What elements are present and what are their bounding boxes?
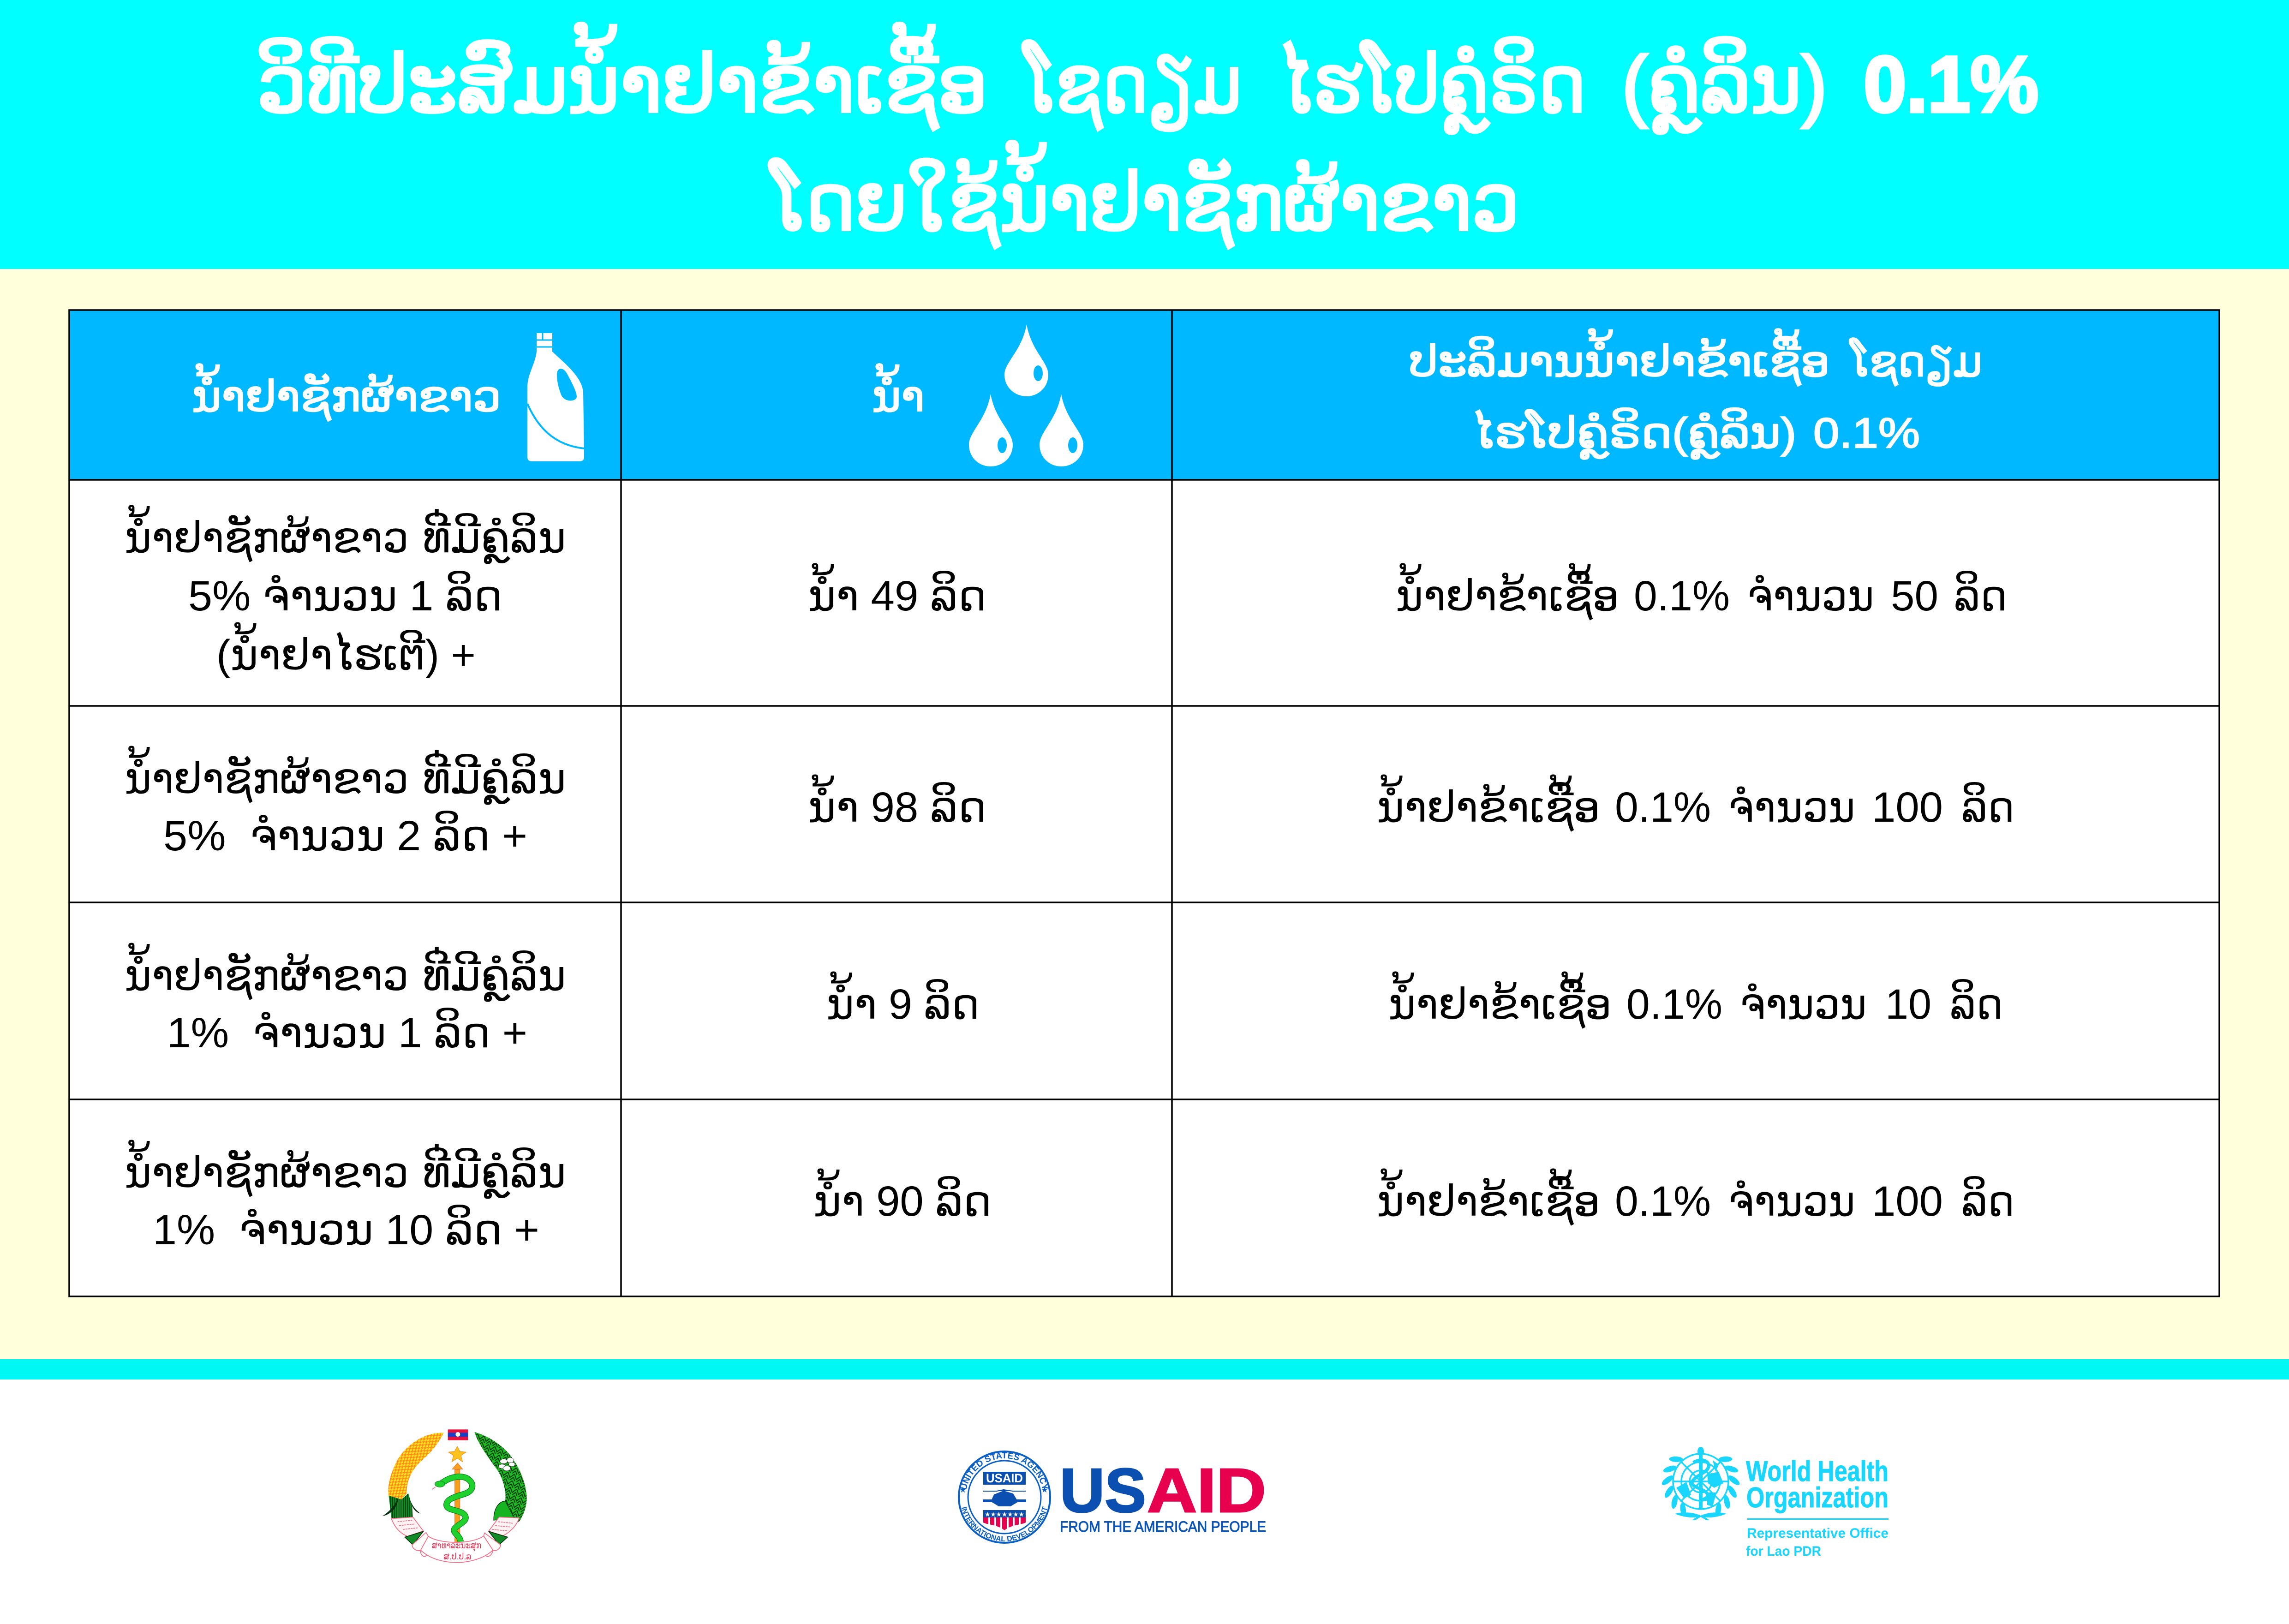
- title banner: ຢາຂ້າເຊື: [662, 40, 940, 129]
- row 4: ີຄຼໍລິນ: [481, 1149, 566, 1196]
- row 2: 0.1%: [1615, 784, 1711, 831]
- USAID seal: ★: [1041, 1485, 1048, 1494]
- row 1: ຳ: [240, 632, 281, 679]
- row 1: 0.1%: [1634, 573, 1730, 620]
- header: result column: ້: [1588, 328, 1613, 340]
- row 3: ຢາຊັກຜ້າຂາວ: [174, 952, 417, 999]
- row 3: 1% ຈຳນວນ 1 ລິດ +: [167, 1007, 527, 1057]
- title banner: ຳ: [586, 40, 662, 129]
- icon: water drops: [969, 324, 1083, 466]
- row 1: ລິດ: [1954, 570, 2007, 620]
- row 2: ີຄຼໍລິນ: [481, 755, 566, 802]
- header: bleach column: ນ: [192, 373, 220, 420]
- emblem ministry name: ສາທາລະນະສຸກ: [432, 1540, 481, 1552]
- WHO office: Representative Office: [1747, 1526, 1889, 1541]
- laurels: [1661, 1456, 1741, 1520]
- row 3: 9 ລິດ: [889, 981, 980, 1028]
- row 3: ີຄຼໍລິນ: [481, 952, 566, 999]
- row 2: ອ: [1574, 784, 1600, 831]
- row 1: ຢາຊັກຜ້າຂາວ: [174, 514, 417, 561]
- globe: [1673, 1454, 1728, 1509]
- row 2: ຢາຊັກຜ້າຂາວ: [174, 755, 417, 802]
- row 2: 5% ຈຳນວນ 2 ລິດ +: [163, 810, 527, 860]
- row 3: ມ: [451, 950, 481, 999]
- USAID seal: ★★★★★★★: [985, 1511, 1024, 1518]
- row 2: ທີ: [423, 755, 450, 802]
- row 4: ທີ: [423, 1149, 450, 1196]
- emblem staff: [452, 1463, 463, 1542]
- header: result column: ປະລິມານນ: [1409, 338, 1599, 385]
- row 1: ຢາໄຮເຕີ) +: [281, 632, 477, 679]
- title banner: 0.1%: [1864, 40, 2038, 129]
- row 1: ທີ: [423, 514, 450, 561]
- row 3: 0.1%: [1626, 981, 1722, 1028]
- row 4: ນ: [1377, 1178, 1405, 1225]
- row 3: ນ: [1388, 981, 1416, 1028]
- row 2: ່: [435, 750, 439, 758]
- row 4: [125, 1140, 2014, 1254]
- header: bleach column: ຢາຊັກຜ້າຂາວ: [245, 373, 488, 420]
- logo: Lao Ministry of Health emblem: [382, 1429, 527, 1563]
- title banner: ອ: [938, 40, 988, 129]
- emblem green sheaf: [474, 1432, 527, 1522]
- title banner: ໂຊດຽມ: [1022, 40, 1242, 131]
- WHO office: for Lao PDR: [1746, 1544, 1821, 1559]
- row 3: ຈຳນວນ: [1740, 981, 1867, 1028]
- row 1: ຳ: [1405, 573, 1446, 620]
- row 4: ຈຳນວນ: [1728, 1178, 1855, 1225]
- row 3: [125, 943, 2003, 1057]
- logo: World Health Organization: [1661, 1447, 1889, 1559]
- header: result column: ໄຮໂປຄຼໍຣິດ(ຄຼໍລິນ): [1471, 407, 1796, 460]
- WHO name: Organization: [1746, 1482, 1889, 1514]
- row 3: ຳ: [836, 981, 877, 1028]
- emblem ministry name: ສ.ປ.ປ.ລ: [444, 1552, 472, 1561]
- row 4: 100: [1872, 1178, 1943, 1225]
- row 4: ຳ: [1386, 1178, 1427, 1225]
- table header row background: [69, 310, 2219, 480]
- title banner: [0, 0, 2289, 269]
- row 2: ້: [812, 774, 834, 786]
- row 3: ້: [1561, 971, 1584, 983]
- title banner: ໄຮໂປຄຼໍຣິດ: [1278, 37, 1586, 134]
- row 4: 90 ລິດ: [876, 1178, 991, 1225]
- row 4: ອ: [1574, 1178, 1600, 1225]
- row 3: ນ: [125, 952, 153, 999]
- WHO emblem: [1661, 1447, 1741, 1520]
- row 4: ຢາຂ້າເຊື: [1427, 1178, 1576, 1225]
- row 3: ້: [128, 943, 150, 955]
- USAID seal: ★: [959, 1485, 967, 1494]
- emblem star: [448, 1446, 466, 1462]
- row 1: ້: [1568, 563, 1591, 575]
- row 1: ້: [812, 563, 834, 575]
- row 4: ຳ: [823, 1178, 864, 1225]
- row 2: ນ: [808, 784, 836, 831]
- row 4: 1% ຈຳນວນ 10 ລິດ +: [153, 1204, 539, 1254]
- title banner: (ຄຼໍລິນ): [1622, 37, 1827, 134]
- WHO office: [1746, 1526, 1889, 1559]
- row 4: ້: [128, 1140, 150, 1152]
- WHO name: World Health: [1746, 1456, 1889, 1487]
- row 1: ນ: [1396, 573, 1424, 620]
- USAID seal: USAID: [986, 1471, 1023, 1485]
- row 4: ້: [1380, 1168, 1403, 1180]
- row 2: ຳ: [1386, 784, 1427, 831]
- header: result column: 0.1%: [1813, 410, 1920, 457]
- row 2: ຳ: [134, 755, 174, 802]
- row 1: ອ: [1593, 573, 1619, 620]
- row 2: ້: [1380, 774, 1403, 786]
- title banner: ໂດຍໃຊ້ນ: [771, 158, 1065, 247]
- header: result column: ຳ: [1595, 338, 1639, 385]
- row 1: ນ: [808, 573, 836, 620]
- table body background: [69, 480, 2219, 1296]
- row 3: ຢາຂ້າເຊື: [1439, 981, 1587, 1028]
- row 3: ້: [1392, 971, 1414, 983]
- row 3: ຳ: [134, 952, 174, 999]
- row 4: ຳ: [134, 1149, 174, 1196]
- row 1: ້: [128, 505, 150, 517]
- row 2: [125, 746, 2014, 860]
- title banner: ວິທີປະສົມນ: [257, 40, 623, 129]
- WHO name: [1746, 1456, 1889, 1514]
- row 1: 49 ລິດ: [871, 573, 986, 620]
- row 2: ້: [1549, 774, 1572, 786]
- logo: USAID: [959, 1451, 1266, 1543]
- row 2: ລິດ: [1961, 782, 2014, 831]
- row 3: ອ: [1585, 981, 1612, 1028]
- row 4: ້: [1549, 1168, 1572, 1180]
- header: water column: ້: [876, 364, 899, 376]
- header: result column: ໂຊດຽມ: [1849, 337, 1982, 386]
- header: bleach column: ້: [196, 364, 220, 376]
- title banner: ຢາຊັກຜ້າຂາວ: [1089, 158, 1543, 247]
- USAID seal: INTERNATIONAL DEVELOPMENT: [960, 1506, 1049, 1543]
- row 2: ນ: [1377, 784, 1405, 831]
- row 3: ຳ: [1398, 981, 1439, 1028]
- row 4: ມ: [451, 1147, 481, 1196]
- row 1: ຈຳນວນ: [1747, 573, 1874, 620]
- title banner: ້: [575, 23, 616, 45]
- row 2: 100: [1872, 784, 1943, 831]
- title banner: ຳ: [1017, 158, 1089, 247]
- row 1: ້: [1399, 563, 1422, 575]
- row 3: 10: [1885, 981, 1931, 1028]
- row 1: (ນ: [216, 632, 258, 679]
- header: water column: [872, 324, 1083, 466]
- USAID wordmark: AID: [1147, 1456, 1266, 1525]
- row 3: ່: [435, 947, 439, 955]
- footer white area: [0, 1379, 2289, 1624]
- emblem ministry name: [432, 1540, 481, 1561]
- row 2: ຳ: [818, 784, 859, 831]
- row 1: ຢາຂ້າເຊື: [1446, 573, 1595, 620]
- row 1: ີຄຼໍລິນ: [481, 514, 566, 561]
- header: result column: ອ: [1801, 338, 1830, 385]
- header: result column: [1409, 328, 1982, 460]
- header: bleach column: [192, 333, 584, 461]
- row 4: 0.1%: [1615, 1178, 1711, 1225]
- USAID seal: [959, 1451, 1050, 1543]
- row 4: ລິດ: [1961, 1176, 2014, 1225]
- header: result column: ຢາຂ້າເຊື: [1639, 338, 1788, 385]
- row 1: [125, 505, 2007, 679]
- header: result column: ້: [1774, 328, 1799, 340]
- row 1: ຳ: [818, 573, 859, 620]
- title banner: ້: [1006, 141, 1046, 163]
- row 4: ້: [817, 1168, 840, 1180]
- USAID tagline: FROM THE AMERICAN PEOPLE: [1060, 1518, 1266, 1535]
- row 2: 98 ລິດ: [871, 784, 986, 831]
- row 3: ້: [830, 971, 852, 983]
- header: water column: ຳ: [882, 373, 925, 420]
- emblem rice sheaf: [382, 1433, 444, 1518]
- row 1: ມ: [451, 513, 481, 561]
- row 2: ມ: [451, 753, 481, 802]
- USAID seal: UNITED STATES AGENCY: [959, 1451, 1050, 1491]
- row 1: ່: [435, 509, 439, 517]
- row 2: ນ: [125, 755, 153, 802]
- row 2: ຈຳນວນ: [1728, 784, 1855, 831]
- row 2: ້: [128, 746, 150, 758]
- table: [69, 310, 2219, 1296]
- emblem snake: [432, 1477, 472, 1542]
- row 4: ນ: [813, 1178, 842, 1225]
- row 3: ລິດ: [1950, 979, 2003, 1028]
- row 1: ຳ: [134, 514, 174, 561]
- emblem ribbons: [391, 1517, 519, 1563]
- header: bleach column: ຳ: [202, 373, 245, 420]
- USAID wordmark: [1060, 1456, 1266, 1525]
- row 4: ່: [435, 1144, 439, 1152]
- row 1: 5% ຈຳນວນ 1 ລິດ: [188, 570, 502, 620]
- header: water column: ນ: [872, 373, 900, 420]
- USAID wordmark: US: [1060, 1456, 1146, 1525]
- row 4: ຢາຊັກຜ້າຂາວ: [174, 1149, 417, 1196]
- footer cyan strip: [0, 1359, 2289, 1379]
- row 2: ຢາຂ້າເຊື: [1427, 784, 1576, 831]
- title banner: ້: [893, 23, 935, 45]
- emblem flag: [448, 1429, 468, 1440]
- row 3: ນ: [826, 981, 855, 1028]
- row 3: ທີ: [423, 952, 450, 999]
- row 1: 50: [1891, 573, 1938, 620]
- row 1: ້: [234, 622, 257, 634]
- row 4: ນ: [125, 1149, 153, 1196]
- icon: bleach bottle: [527, 333, 584, 461]
- row 1: ນ: [125, 514, 153, 561]
